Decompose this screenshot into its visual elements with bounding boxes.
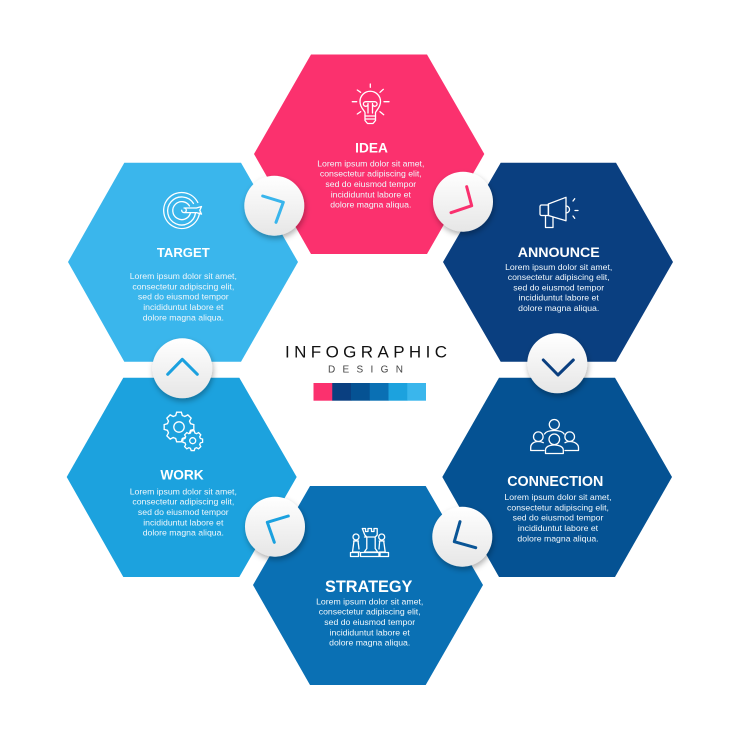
text: strategy description: Lorem ipsum dolor sit amet, (316, 596, 423, 606)
heading: work: WORK (160, 468, 204, 483)
arrow: idea to announce connector (433, 172, 493, 232)
text: idea description: sed do eiusmod tempor (325, 179, 416, 189)
text: strategy description: dolore magna aliqua. (329, 638, 410, 648)
arrow: strategy to work connector (245, 497, 305, 557)
text: connection description: consectetur adipiscing elit, (507, 502, 609, 512)
text: idea description: dolore magna aliqua. (330, 200, 411, 210)
arrow: idea to target connector (244, 176, 304, 236)
text: target description: consectetur adipiscing elit, (132, 281, 234, 291)
text: idea description: consectetur adipiscing elit, (320, 169, 422, 179)
text: work description: dolore magna aliqua. (143, 528, 224, 538)
icon: light bulb (352, 84, 389, 124)
text: connection description: Lorem ipsum dolor sit amet, (504, 492, 612, 502)
heading: announce: ANNOUNCE (518, 245, 600, 261)
text: idea description: incididuntut labore et (331, 189, 411, 199)
panel: target (68, 163, 298, 362)
heading: strategy: STRATEGY (325, 578, 413, 596)
text: strategy description: sed do eiusmod tempor (324, 617, 415, 627)
text: idea description: Lorem ipsum dolor sit amet, (317, 158, 424, 168)
subtitle: DESIGN (328, 364, 403, 376)
arrow: announce to connection connector (527, 333, 587, 393)
title (285, 343, 447, 376)
colour legend bar (314, 383, 426, 401)
panel: work (67, 378, 297, 577)
text: connection description: dolore magna aliqua. (517, 533, 599, 543)
panel: idea (254, 54, 484, 254)
text: strategy description: incididuntut labore et (330, 627, 410, 637)
text: target description: incididuntut labore et (143, 302, 224, 312)
panel: connection (442, 378, 672, 577)
text: strategy description: consectetur adipiscing elit, (319, 607, 421, 617)
heading: connection: CONNECTION (507, 474, 603, 490)
icon: chess pieces (350, 528, 388, 556)
icon: target (164, 192, 202, 228)
panel: announce (443, 163, 673, 362)
text: target description: sed do eiusmod tempor (138, 292, 229, 302)
heading: idea: IDEA (355, 140, 388, 155)
text: work description: Lorem ipsum dolor sit amet, (130, 486, 237, 496)
text: work description: sed do eiusmod tempor (138, 507, 229, 517)
arrow: work to target connector (152, 338, 212, 398)
arrow: connection to strategy connector (432, 507, 492, 567)
text: connection description: sed do eiusmod tempor (513, 513, 603, 523)
text: announce description: sed do eiusmod tempor (513, 282, 604, 292)
title: INFOGRAPHIC (285, 343, 447, 362)
text: announce description: consectetur adipiscing elit, (508, 272, 610, 282)
text: announce description: incididuntut labore et (519, 293, 599, 303)
icon: gears (164, 412, 203, 451)
text: target description: dolore magna aliqua. (143, 312, 224, 322)
panel: strategy (253, 486, 483, 685)
heading: target: TARGET (157, 245, 210, 260)
icon: megaphone (540, 197, 578, 228)
text: connection description: incididuntut labore et (518, 523, 599, 533)
icon: people (531, 420, 578, 454)
text: work description: consectetur adipiscing elit, (132, 497, 234, 507)
text: target description: Lorem ipsum dolor sit amet, (130, 271, 237, 281)
text: work description: incididuntut labore et (143, 517, 224, 527)
text: announce description: Lorem ipsum dolor sit amet, (505, 262, 612, 272)
text: announce description: dolore magna aliqua. (518, 303, 599, 313)
